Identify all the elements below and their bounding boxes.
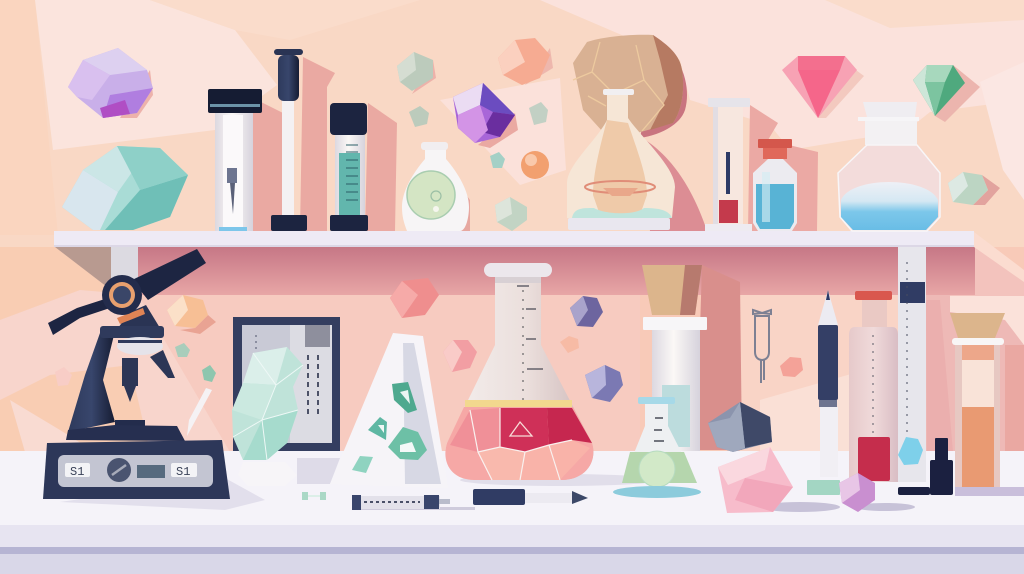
gem: violet crystal	[453, 83, 515, 143]
vial: tall black-cap tube	[208, 89, 262, 231]
microscope: S1	[70, 465, 84, 479]
crystal pyramid	[330, 333, 448, 488]
rock: brown stone	[573, 35, 683, 133]
gem: mint crystal with base	[232, 347, 303, 486]
counter tools: syringe	[352, 495, 475, 510]
small pink gem	[780, 357, 803, 377]
pen marker	[807, 290, 840, 495]
flask: large round amber	[567, 89, 675, 230]
bottle: tall pink with red liquid	[849, 291, 898, 482]
counter tools: pen	[473, 489, 588, 505]
flask: large erlenmeyer red	[445, 263, 593, 480]
top shelf	[54, 231, 974, 279]
microscope: S1	[176, 465, 190, 479]
tool: pipette stand	[271, 49, 307, 231]
gem: small sage crystal	[948, 172, 1000, 205]
wall shadows: top shelf	[120, 40, 980, 231]
ruler: tall	[898, 247, 926, 482]
small violet-pink gem	[839, 473, 875, 512]
tool: tweezers	[753, 310, 771, 383]
flask: round green	[402, 142, 470, 231]
flask: small green erlenmeyer	[613, 397, 701, 498]
bottle: blue with red cap	[753, 139, 797, 231]
gem: pink crystal	[718, 447, 793, 513]
framed chart card	[233, 317, 340, 451]
gem: purple crystal	[68, 48, 153, 118]
dropper bottle black	[898, 438, 953, 495]
gems: centre floating	[390, 278, 623, 402]
cork-topped cylinder	[642, 265, 742, 451]
gem: slate rock	[708, 402, 772, 452]
jar: large blue	[838, 102, 940, 231]
floating gems: left lower	[55, 295, 216, 436]
gem: aqua crystal	[62, 146, 188, 230]
gem: pink diamond	[782, 56, 857, 118]
orange cork tube	[950, 313, 1005, 487]
gem: green diamond	[913, 65, 965, 116]
microscope	[43, 249, 230, 499]
tube: red hourglass tube	[705, 98, 752, 231]
small floating gems top	[397, 38, 550, 231]
counter tools: green clips	[302, 492, 326, 500]
counter	[0, 451, 1024, 574]
vial: green liquid tube	[330, 103, 368, 231]
